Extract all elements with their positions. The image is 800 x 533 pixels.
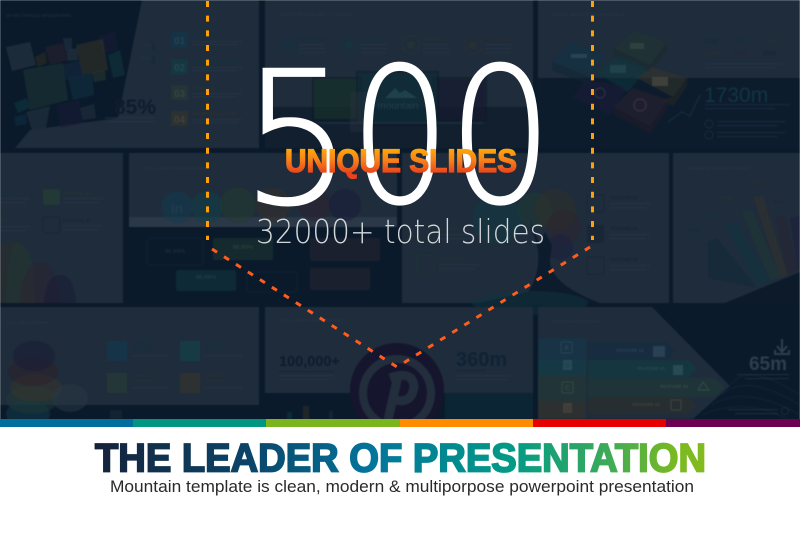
panel: arrow feature list slide [538,307,730,419]
panel: social media circles slide: 96.99% [233,245,254,251]
panel: laptop slide: LAPTOP DEVICE SIDE OF SCREEN [279,12,353,17]
panel: stacked discs slide [0,307,259,428]
panel: 3D rectangle infographic: SECOND FEATURE [192,60,239,66]
panel: laptop slide: FEATURE 04 [485,37,512,42]
panel: tree infographic slide: FEATURE 02 [439,227,467,232]
panel: stacked discs slide: SAMPLE [131,341,150,346]
panel: feature columns slide: E 02 [0,191,10,196]
panel: 3D rectangle infographic [6,0,259,148]
panel: Pinterest statistics slide: SOCIAL MEDIA INFOGRAPHIC [279,318,343,323]
panel: 3D bar chart slide: 25% [703,213,716,219]
panel: social media 3D blocks: 232k [705,51,719,57]
title: THE LEADER OF PRESENTATION [95,436,706,480]
panel: 3D bar chart slide [673,153,800,303]
subtitle: Mountain template is clean, modern & multiporpose powerpoint presentation [110,477,694,496]
panel: feature columns slide: E 05 [0,218,10,223]
panel: 3D rectangle infographic: 3D RECTANGLE INFOGRAPHIC [6,13,73,18]
panel: 65m dark contour slide: 65m [749,354,787,375]
panel: 3D bar chart slide: 45% [773,200,786,206]
headline number 500: 0 [350,28,450,246]
panel: arrow feature list slide: D [565,406,570,413]
panel: stacked discs slide: SAMPLE [204,373,223,378]
panel: 3D rectangle infographic: 75% [141,43,152,49]
white footer [0,427,800,533]
panel: social media 3D blocks: 232k [734,51,748,57]
panel: laptop slide: FEATURE 03 [423,37,450,42]
panel: 3D rectangle infographic: 25% [141,56,152,62]
panel: 3D bar chart slide: 65% [720,196,733,202]
panel: social media 3D blocks: 232k [705,39,719,45]
panel: tree infographic slide: FEATURE 05 [610,226,638,231]
panel: arrow feature list slide: FEATURE 03 [660,384,688,389]
panel: laptop slide: mountain [377,101,419,112]
panel: 3D rectangle infographic: 85% [114,96,156,119]
panel: tree infographic slide: FEATURE 03 [439,257,467,262]
panel: tree infographic slide: FEATURE 06 [610,257,638,262]
colour stripe bar [0,419,800,427]
panel: arrow feature list slide: FEATURE 01 [616,348,644,353]
panel: arrow feature list slide: FEATURE 04 [632,402,660,407]
panel: 65m dark contour slide [702,339,800,420]
panel: 3D bar chart slide: 54% [688,228,701,234]
panel: arrow feature list slide: ARROW INFOGRAPHIC [553,319,603,324]
panel: stacked discs slide: CONTENT [131,346,153,351]
panel: stacked discs slide: CONTENT [204,378,226,383]
panel: social media 3D blocks: SOCIAL MEDIA PERFORMANCE 01 [552,12,626,17]
panel: 3D bar chart slide: INCREASE GROWTH PROFIT [688,166,750,171]
panel: social media 3D blocks: 232k [734,39,748,45]
panel: social media 3D blocks [538,0,800,148]
headline number 500: 0 [448,28,553,247]
panel: arrow feature list slide: FEATURE 02 [637,366,665,371]
panel: arrow feature list slide: B [565,363,570,370]
panel: tree infographic slide [402,153,669,315]
panel: social media 3D blocks: 232k [763,51,777,57]
subheading: unique slides: UNIQUE SLIDES [285,143,517,179]
panel: social media 3D blocks: 232k [763,39,777,45]
headline number 500 [241,28,553,247]
panel: social media circles slide [129,153,397,292]
panel: laptop slide: FEATURE 02 [361,37,388,42]
panel: Pinterest statistics slide: 100,000+ [279,354,340,370]
panel: arrow feature list slide: C [565,385,570,392]
caption: total slides: 32000+ total slides [256,212,545,251]
panel: social media circles slide: SOCIAL MEDIA INFOGRAPHICS [143,166,210,171]
panel: feature columns slide: FEATURE 06 [63,218,91,223]
panel: 3D rectangle infographic: FEATURE [192,86,216,92]
panel: Pinterest statistics slide [265,307,533,437]
panel: 3D rectangle infographic: 03 [174,89,185,100]
panel: Pinterest statistics slide: 360m [456,349,507,371]
panel: 3D rectangle infographic: 04 [174,115,185,126]
panel: stacked discs slide: CONTENT [204,346,226,351]
panel: social media circles slide: in [171,200,183,216]
bottom slide row peeking above the stripes [110,406,333,419]
panel: feature columns slide [0,153,123,303]
panel: tree infographic slide: FEATURE 04 [610,195,638,200]
panel: 3D rectangle infographic: FEATURE [192,34,216,40]
panel: stacked discs slide: THIRD [131,373,146,378]
dashed funnel outline [208,1,592,367]
panel: stacked discs slide: DISC INFOGRAPHIC [6,320,49,325]
panel: stacked discs slide: CONTENT [131,378,153,383]
panel: laptop slide: FEATURE 01 [299,37,326,42]
panel: arrow feature list slide: A [564,345,569,352]
panel: feature columns slide: FEATURE 04 [63,191,91,196]
panel: 3D rectangle infographic: 02 [174,63,185,74]
panel: social media circles slide: 96.99% [165,249,186,255]
headline number 500: 5 [241,33,353,247]
panel: 3D bar chart slide: 80% [752,182,765,188]
panel: 3D rectangle infographic: 01 [174,36,185,47]
panel: social media 3D blocks: 1730m [704,84,768,107]
panel: 3D rectangle infographic: FOURTH FEATURE [192,112,238,118]
panel: stacked discs slide: SECOND [204,341,224,346]
panel: social media circles slide: 96.99% [196,275,217,281]
panel: laptop slide [265,0,533,148]
